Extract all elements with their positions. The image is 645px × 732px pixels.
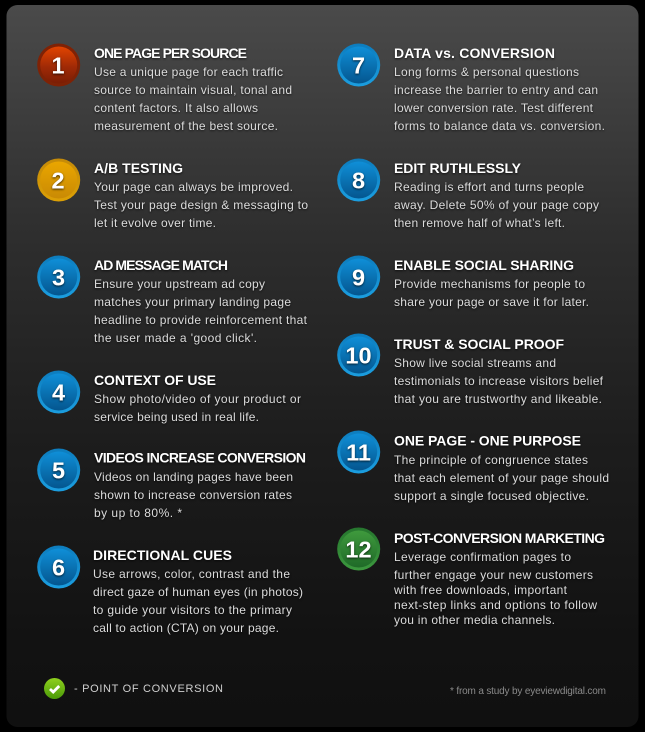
text block 7: [394, 65, 605, 133]
text block 7: Long forms & personal questions: [394, 65, 579, 79]
text block 2: Test your page design & messaging to: [94, 198, 308, 212]
icon: number 4: 4: [52, 380, 65, 406]
text block 7: increase the barrier to entry and can: [394, 83, 598, 97]
icon: number 9: [337, 256, 380, 298]
icon: number 10: [337, 334, 380, 376]
icon: number 4: [37, 370, 80, 414]
icon: number 1: 1: [51, 52, 65, 78]
icon: number 12: [337, 528, 380, 570]
text block 4: Show photo/video of your product or: [94, 392, 301, 406]
text block 9: Provide mechanisms for people to: [394, 277, 585, 291]
text block 3: the user made a 'good click'.: [94, 331, 257, 345]
text block 6: [93, 567, 303, 635]
text block 11: support a single focused objective.: [394, 489, 589, 503]
text block 12: with free downloads, important: [393, 583, 568, 597]
icon: number 11: 11: [346, 440, 371, 466]
text block 5: shown to increase conversion rates: [94, 488, 292, 502]
text block 11: [394, 453, 609, 503]
icon: number 6: [37, 546, 80, 588]
text block 6: call to action (CTA) on your page.: [93, 621, 279, 635]
item 12: post-conversion marketing: [337, 528, 605, 627]
text block 12: [393, 550, 597, 627]
heading 12: POST-CONVERSION MARKETING: [394, 530, 605, 546]
heading 7: DATA vs. CONVERSION: [394, 45, 555, 61]
icon: number 2: 2: [51, 168, 65, 194]
icon: number 11: [337, 430, 380, 474]
heading 8: EDIT RUTHLESSLY: [394, 160, 522, 176]
text block 4: [94, 392, 301, 424]
item 10: trust and social proof: [337, 334, 604, 406]
icon: number 5: [37, 448, 80, 492]
heading 2: A/B TESTING: [94, 160, 183, 176]
icon: number 1: [37, 44, 80, 86]
item 3: ad message match: [37, 256, 308, 345]
icon: number 12: 12: [345, 536, 372, 562]
text block 1: [94, 65, 292, 133]
text block 3: headline to provide reinforcement that: [94, 313, 308, 327]
heading 3: AD MESSAGE MATCH: [94, 257, 228, 273]
text block 2: [94, 180, 308, 230]
text block 6: Use arrows, color, contrast and the: [93, 567, 290, 581]
footnote: * from a study by eyeviewdigital.com: [450, 686, 606, 697]
text block 8: away. Delete 50% of your page copy: [394, 198, 599, 212]
text block 10: Show live social streams and: [394, 356, 556, 370]
item 1: one page per source: [37, 44, 292, 133]
icon: number 7: 7: [352, 52, 365, 78]
text block 2: let it evolve over time.: [94, 216, 216, 230]
text block 1: source to maintain visual, tonal and: [94, 83, 292, 97]
text block 1: content factors. It also allows: [94, 101, 258, 115]
text block 3: Ensure your upstream ad copy: [94, 277, 265, 291]
text block 10: [394, 356, 604, 406]
text block 7: lower conversion rate. Test different: [394, 101, 594, 115]
heading 10: TRUST & SOCIAL PROOF: [394, 336, 564, 352]
text block 11: The principle of congruence states: [394, 453, 588, 467]
text block 6: direct gaze of human eyes (in photos): [93, 585, 303, 599]
item 8: edit ruthlessly: [337, 158, 599, 230]
item 6: directional cues: [37, 546, 303, 635]
text block 3: matches your primary landing page: [94, 295, 291, 309]
icon: number 8: 8: [352, 168, 365, 194]
legend: point of conversion: [44, 678, 223, 699]
icon: number 3: 3: [52, 264, 65, 290]
text block 8: Reading is effort and turns people: [394, 180, 584, 194]
item 9: enable social sharing: [337, 256, 589, 309]
text block 8: [394, 180, 599, 230]
icon: number 6: 6: [52, 554, 65, 580]
heading 9: ENABLE SOCIAL SHARING: [394, 257, 574, 273]
heading 1: ONE PAGE PER SOURCE: [94, 45, 247, 61]
icon: number 8: [337, 158, 380, 202]
heading 4: CONTEXT OF USE: [94, 372, 216, 388]
item 5: videos increase conversion: [37, 448, 306, 520]
heading 6: DIRECTIONAL CUES: [93, 547, 232, 563]
text block 11: that each element of your page should: [394, 471, 609, 485]
heading 11: ONE PAGE - ONE PURPOSE: [394, 432, 581, 448]
item 11: one page one purpose: [337, 430, 609, 503]
text block 12: you in other media channels.: [394, 613, 555, 627]
text block 12: further engage your new customers: [394, 568, 593, 582]
text block 10: testimonials to increase visitors belief: [394, 374, 604, 388]
heading 5: VIDEOS INCREASE CONVERSION: [94, 450, 306, 466]
icon: number 7: [337, 44, 380, 86]
icon: green check: [44, 678, 65, 699]
text block 5: by up to 80%. *: [94, 506, 182, 520]
text block 7: forms to balance data vs. conversion.: [394, 119, 605, 133]
icon: number 2: [37, 158, 80, 202]
legend label: - POINT OF CONVERSION: [74, 683, 223, 695]
text block 5: [94, 470, 293, 520]
item 2: a/b testing: [37, 158, 308, 230]
item 4: context of use: [37, 370, 301, 424]
text block 6: to guide your visitors to the primary: [93, 603, 292, 617]
text block 9: share your page or save it for later.: [394, 295, 589, 309]
text block 5: Videos on landing pages have been: [94, 470, 293, 484]
text block 4: service being used in real life.: [94, 410, 259, 424]
icon: number 5: 5: [52, 458, 65, 484]
text block 1: measurement of the best source.: [94, 119, 278, 133]
text block 10: that you are trustworthy and likeable.: [394, 392, 602, 406]
icon: number 10: 10: [345, 342, 372, 368]
icon: number 9: 9: [352, 264, 365, 290]
text block 8: then remove half of what’s left.: [394, 216, 565, 230]
icon: number 3: [37, 256, 80, 298]
item 7: data vs. conversion: [337, 44, 605, 133]
text block 12: next-step links and options to follow: [394, 598, 597, 612]
text block 1: Use a unique page for each traffic: [94, 65, 283, 79]
text block 3: [94, 277, 308, 345]
text block 12: Leverage confirmation pages to: [394, 550, 571, 564]
text block 9: [394, 277, 589, 309]
text block 2: Your page can always be improved.: [94, 180, 293, 194]
